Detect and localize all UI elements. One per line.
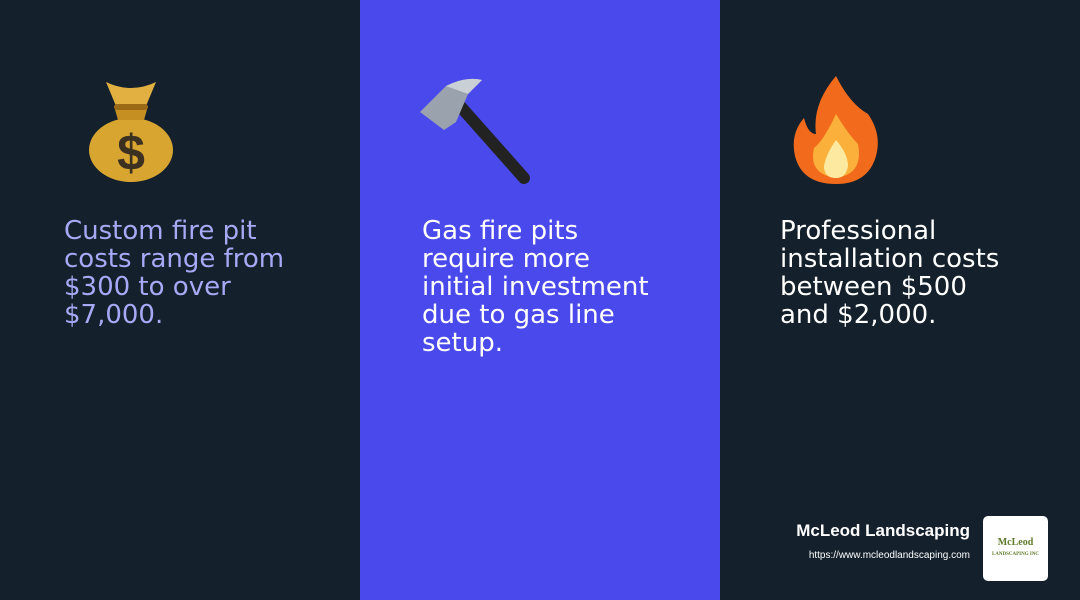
logo: [983, 516, 1048, 581]
panel: professional installation: [720, 0, 1080, 600]
logo: McLeod: [998, 537, 1033, 548]
text: professional installation: Professional installation costs between $500 and $2,000.: [780, 216, 999, 330]
icon: money bag: [89, 82, 173, 182]
brand: company name and url: https://www.mcleodlandscaping.com: [809, 550, 970, 561]
icon: hammer: [420, 78, 530, 184]
panel: gas fire pits: [360, 0, 720, 600]
text: custom fire pit costs: Custom fire pit costs range from $300 to over $7,000.: [64, 216, 284, 330]
icon: money bag: $: [117, 125, 145, 181]
icon: fire: [794, 76, 878, 184]
text: gas fire pits: Gas fire pits require more initial investment due to gas line setup.: [422, 216, 649, 358]
panel: custom cost: [0, 0, 360, 600]
brand: company name and url: [796, 521, 970, 561]
logo: LANDSCAPING INC: [992, 552, 1039, 557]
brand: company name and url: McLeod Landscaping: [796, 521, 970, 540]
